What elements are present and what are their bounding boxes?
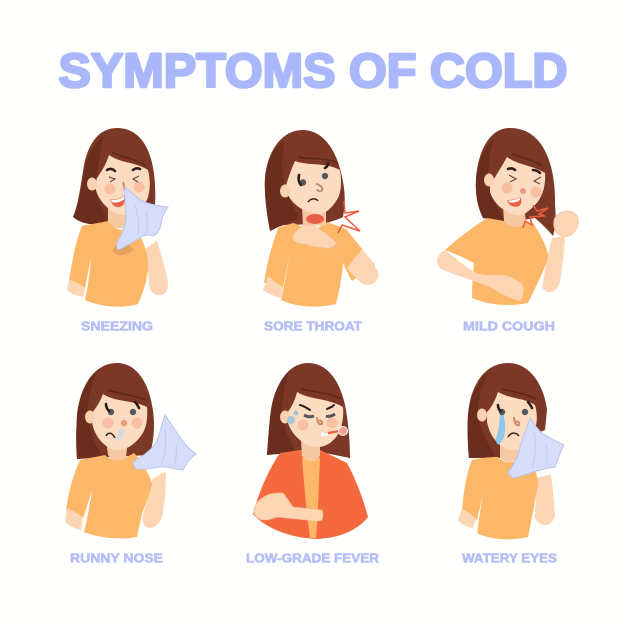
hair shadow [265,140,300,231]
shirt [445,218,549,305]
shirt [264,222,375,307]
label: MILD COUGH [463,320,555,334]
label: LOW-GRADE FEVER [246,552,379,566]
face [92,394,147,450]
pain burst [338,201,360,233]
cheeks [298,420,308,430]
robe [253,450,368,539]
arm [254,493,323,521]
eyes [304,414,335,417]
brows [299,163,328,185]
nose [520,188,526,194]
hair shadow [267,370,296,455]
panel: sore throat [263,130,379,334]
eyes [300,179,306,186]
nose [123,182,125,190]
fringe stroke [512,154,543,166]
closed eyes [509,175,541,184]
nose [316,184,322,191]
face [490,157,545,215]
nose [514,417,519,425]
forearm on belly [437,250,524,301]
hair shadow [476,137,505,221]
mouth [308,199,318,202]
hair [468,363,547,458]
panel: mild cough [437,128,578,334]
brows [300,405,334,410]
throat [306,214,324,224]
mouth [507,197,521,207]
hair shadow [73,136,108,224]
tissue shadow [112,235,134,255]
ear [477,408,487,422]
eyes [108,409,114,415]
mouth [508,433,519,437]
left forearm [67,280,85,297]
tear [496,415,505,444]
nose [121,420,127,426]
left forearm [263,276,283,298]
hair shadow [468,370,495,458]
mouth [110,196,125,207]
label: RUNNY NOSE [70,552,163,566]
mouth [106,433,115,438]
shirt [462,457,538,539]
raised arm [146,240,168,295]
neck [106,440,128,461]
cheeks [102,418,114,428]
fringe stroke [108,390,145,400]
hair [76,363,154,459]
fringe stroke [298,157,338,163]
inner shirt [302,458,320,538]
shirt [66,453,152,538]
runny drop [117,428,125,441]
sweat drops [287,416,295,424]
hair [267,363,350,458]
hair [265,130,345,231]
hair shadow [76,370,102,459]
closed eyes [109,176,139,182]
face [487,392,537,450]
panel: watery eyes [458,363,564,566]
eyes [499,409,505,415]
face [95,155,150,215]
nose [317,417,322,424]
raised arm [542,236,565,292]
panel: low-grade fever [246,363,379,566]
label: SNEEZING [81,320,153,334]
fist [554,211,578,236]
ear [484,174,494,186]
fringe stroke [112,152,146,166]
title: SYMPTOMS OF COLD [58,44,568,98]
forearm right [347,249,379,285]
face [287,392,343,447]
label: SORE THROAT [264,320,362,334]
tissue folds [162,430,176,466]
left forearm [65,508,83,530]
brows [107,168,140,171]
left forearm [458,509,476,528]
shirt [69,220,148,307]
cheeks [502,182,512,194]
ear [280,184,290,198]
ear [85,410,95,424]
brows [498,402,532,411]
raised arm [143,472,166,528]
tissue folds [532,432,548,468]
brows [508,168,540,173]
hair [476,128,556,236]
thermometer [321,426,348,436]
neck [500,440,520,462]
fringe stroke [502,389,536,399]
face [285,161,341,214]
tissue [133,415,196,470]
tissue [116,187,168,250]
panel: runny nose [65,363,196,566]
neck [302,207,326,226]
label: WATERY EYES [462,552,557,566]
pain burst [523,205,548,228]
brows [106,402,139,411]
hand [293,225,337,248]
tissue folds [135,205,148,235]
ear [280,410,290,424]
neck [108,205,128,228]
fringe stroke [301,389,341,399]
hair [73,128,155,224]
panel: sneezing [67,128,168,334]
ear [87,178,97,190]
cheeks [104,184,116,194]
neck [301,440,320,461]
tissue [508,418,564,478]
raised arm [535,475,555,525]
neck [503,205,526,227]
